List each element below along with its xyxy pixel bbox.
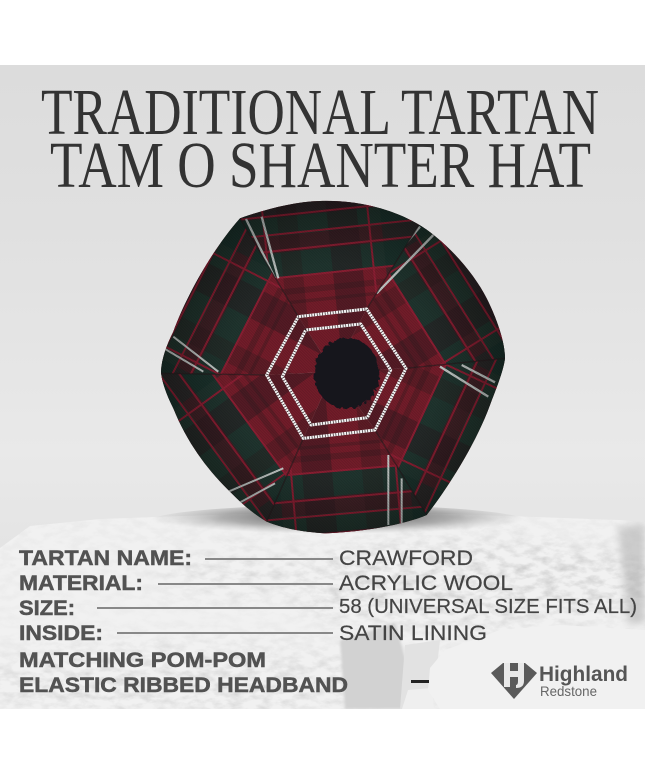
panel: lower right [358,358,505,515]
spec: tartan name: CRAWFORD [339,547,473,570]
spec: inside: INSIDE: [19,622,103,645]
logo: Highland Redstone [491,663,628,699]
feature: matching pom-pom: MATCHING POM-POM [19,649,266,672]
tartan hat [161,200,505,534]
spec: material [19,572,513,595]
panel: bottom [266,396,426,534]
spec: inside [19,622,487,645]
title [41,76,599,202]
spec: material: ACRYLIC WOOL [339,572,513,595]
stitched hexagon bands [267,309,406,438]
spec: tartan name: TARTAN NAME: [19,547,192,570]
logo: Highland Redstone: Redstone [540,683,597,699]
spec: size: 58 (UNIVERSAL SIZE FITS ALL) [339,596,637,618]
fabric twill and seams [150,195,517,542]
spec: inside: SATIN LINING [339,622,487,645]
spec: size: SIZE: [19,597,75,620]
panel: top [240,200,420,353]
spec: tartan name [19,547,473,570]
hat shadow [148,505,528,539]
spec: material: MATERIAL: [19,572,143,595]
pom-pom [314,338,379,409]
logo: Highland Redstone: Highland [539,663,628,686]
panel: lower left [161,372,322,522]
spec: size [19,596,637,620]
feature: elastic headband: ELASTIC RIBBED HEADBAND [19,674,348,697]
stone plinth [0,510,645,709]
panel: upper right [351,224,505,370]
panel: upper left [161,218,322,375]
